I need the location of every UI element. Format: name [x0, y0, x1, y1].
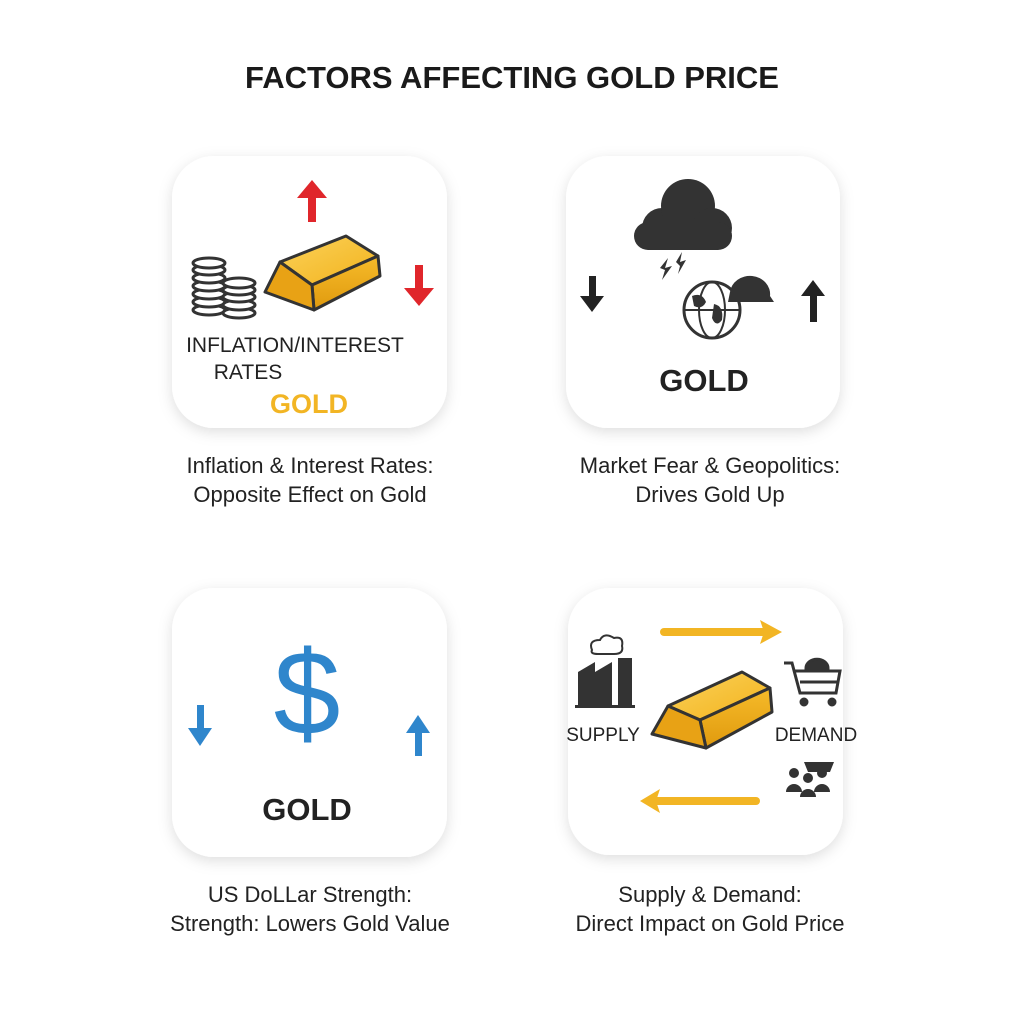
label: supply: SUPPLY: [566, 725, 640, 746]
icon: globe with helmet: [684, 276, 774, 338]
label: inflation/interest rates: INFLATION/INTEREST: [186, 334, 404, 357]
panel: market fear: [566, 156, 840, 428]
icon: blue up arrow: [406, 715, 430, 756]
icon: black up arrow: [801, 280, 825, 322]
caption: inflation: [186, 453, 434, 507]
icon: gold bar: [652, 672, 772, 748]
icon: blue down arrow: [188, 705, 212, 746]
icon: black down arrow: [580, 276, 604, 312]
icon: red down arrow: [404, 265, 434, 306]
caption: market fear: [580, 453, 840, 507]
arrow: right: [660, 620, 782, 644]
caption: market fear: Drives Gold Up: [635, 482, 785, 507]
caption: supply & demand: [576, 882, 844, 936]
arrow: left: [640, 789, 760, 813]
caption: inflation: Inflation & Interest Rates:: [186, 453, 434, 478]
icon: red up arrow: [297, 180, 327, 222]
caption: supply & demand: Supply & Demand:: [618, 882, 802, 907]
panel: supply & demand: [566, 588, 857, 855]
label: gold: GOLD: [659, 363, 749, 398]
icon: dollar sign: $: [274, 626, 340, 760]
label: gold: GOLD: [270, 389, 348, 419]
icon: shopping cart: [784, 659, 840, 705]
caption: us dollar: Strength: Lowers Gold Value: [170, 911, 450, 936]
caption: us dollar: [170, 882, 450, 936]
panel: us dollar: [172, 588, 447, 857]
icon: gold bar: [265, 236, 380, 310]
icon: coins: [193, 258, 255, 318]
title: FACTORS AFFECTING GOLD PRICE: [245, 60, 779, 95]
caption: us dollar: US DoLLar Strength:: [208, 882, 412, 907]
caption: inflation: Opposite Effect on Gold: [193, 482, 427, 507]
icon: cloud: [634, 179, 732, 250]
caption: supply & demand: Direct Impact on Gold Price: [576, 911, 844, 936]
icon: factory: [575, 635, 635, 708]
panel: inflation & interest rates: [172, 156, 447, 428]
caption: market fear: Market Fear & Geopolitics:: [580, 453, 840, 478]
icon: lightning: [660, 252, 686, 280]
icon: people: [786, 762, 834, 797]
label: gold: GOLD: [262, 792, 352, 827]
label: demand: DEMAND: [775, 725, 857, 746]
panel: inflation & interest rates: RATES: [214, 361, 282, 384]
